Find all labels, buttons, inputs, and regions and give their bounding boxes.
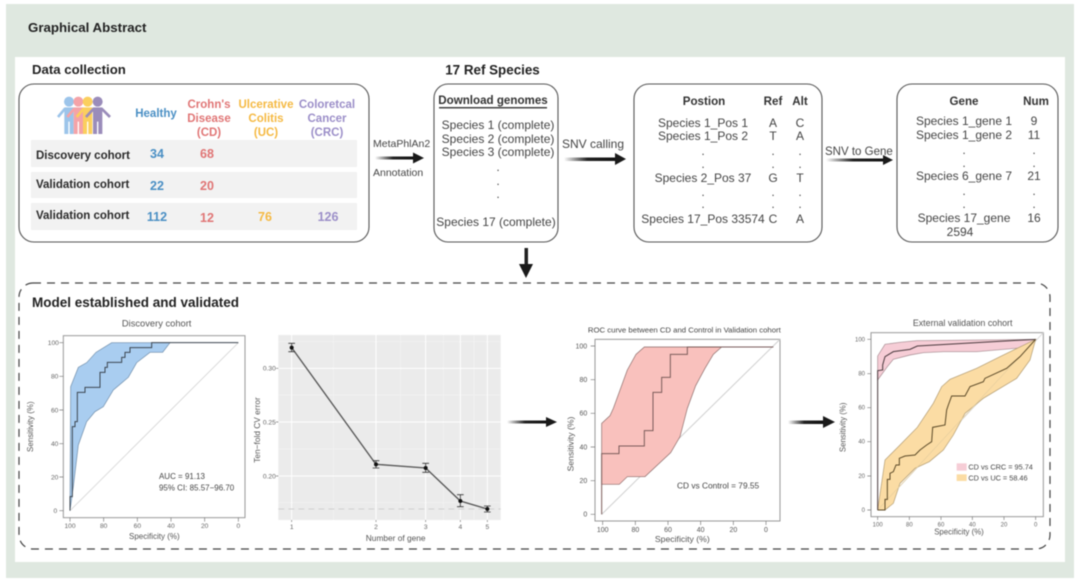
chart: validation ROC: 40: [697, 527, 705, 534]
chart: validation ROC: 20: [729, 527, 737, 534]
panel: SNV positions: Species 1_Pos 2: [658, 129, 748, 143]
panel: gene table: .: [962, 156, 966, 170]
panel: SNV positions: Alt: [792, 95, 808, 108]
chart: discovery ROC: 20: [51, 474, 59, 481]
chart: discovery ROC: 0: [53, 508, 57, 515]
chart: cross-validation error: 0.30: [263, 366, 276, 373]
panel: download genomes: .: [496, 160, 500, 174]
panel: SNV positions: .: [701, 144, 705, 158]
legend: CD vs UC = 58.46: [968, 473, 1028, 482]
chart: external validation ROC: 0: [1034, 522, 1038, 528]
chart: cross-validation error: 3: [424, 524, 428, 531]
chart: external validation ROC: 60: [938, 522, 945, 528]
legend: [957, 462, 1033, 482]
column header: healthy: Healthy: [135, 108, 177, 120]
row: external validation cohort: Validation cohort: [36, 210, 129, 222]
panel: SNV positions: .: [701, 185, 705, 199]
panel: SNV positions: Postion: [683, 95, 725, 108]
label: SNV calling: SNV calling: [562, 137, 624, 151]
chart: validation ROC: 0: [583, 512, 587, 519]
panel: SNV positions: .: [798, 197, 802, 211]
panel: gene table: [897, 84, 1058, 242]
column header: Crohn's disease: Crohn's: [188, 99, 230, 111]
panel: gene table: Species 17_gene: [918, 211, 1011, 225]
chart: validation ROC: Specificity (%): [655, 534, 710, 544]
panel: gene table: .: [1032, 184, 1036, 198]
panel: download genomes: Download genomes: [438, 94, 548, 107]
panel: gene table: .: [1032, 143, 1036, 157]
row: external validation cohort: [36, 210, 338, 225]
panel: download genomes: .: [496, 174, 500, 188]
arrow: to validation ROC: [507, 417, 557, 427]
chart: discovery ROC: Discovery cohort: [122, 318, 192, 328]
row: discovery cohort: Discovery cohort: [36, 150, 130, 162]
panel: model established and validated: [19, 283, 1050, 549]
column header: colorectal cancer: Coloretcal: [299, 99, 355, 111]
chart: external validation ROC: Specificity (%): [934, 528, 984, 537]
chart: discovery ROC: 100: [64, 523, 76, 530]
label: MetaPhlAn2: MetaPhlAn2: [373, 138, 430, 150]
panel: SNV positions: T: [796, 171, 804, 185]
chart: cross-validation error: 5: [485, 524, 489, 531]
panel: SNV positions: .: [798, 185, 802, 199]
panel: SNV positions: T: [769, 129, 777, 143]
column header: Crohn's disease: (CD): [197, 127, 221, 139]
chart: discovery ROC: 80: [100, 523, 108, 530]
chart: validation ROC: 20: [579, 478, 587, 485]
chart: validation ROC: 100: [597, 527, 609, 534]
chart: cross-validation error: [252, 335, 501, 543]
chart: cross-validation error: 0.25: [263, 419, 276, 426]
chart: external validation ROC: 40: [858, 440, 866, 446]
row: validation cohort: Validation cohort: [36, 179, 129, 191]
chart: external validation ROC: 100: [873, 522, 883, 528]
panel: gene table: .: [962, 184, 966, 198]
panel: download genomes: Species 2 (complete): [442, 132, 554, 146]
panel: SNV positions: [634, 84, 822, 242]
column header: Crohn's disease: Disease: [187, 113, 231, 125]
panel: gene table: Num: [1023, 95, 1049, 108]
row: discovery cohort: 34: [150, 147, 164, 161]
chart: validation ROC: 60: [664, 527, 672, 534]
AUC note: AUC = 91.13: [159, 472, 205, 481]
panel: gene table: .: [962, 197, 966, 211]
row: discovery cohort: [36, 147, 214, 162]
panel: SNV positions: G: [768, 171, 778, 185]
row: external validation cohort: 76: [258, 210, 272, 224]
chart: external validation ROC: 80: [906, 522, 913, 528]
chart: discovery ROC: 60: [134, 523, 141, 530]
CD vs UC band: [878, 339, 1036, 510]
panel: gene table: 16: [1027, 211, 1041, 225]
chart: external validation ROC: 20: [858, 474, 866, 480]
panel: SNV positions: Species 2_Pos 37: [655, 171, 752, 185]
row: validation cohort: [36, 179, 214, 193]
column header: ulcerative colitis: Colitis: [248, 113, 284, 125]
panel: SNV positions: C: [796, 116, 805, 130]
panel: SNV positions: Species 17_Pos 33574: [641, 212, 765, 226]
error line: [292, 348, 487, 509]
chart: discovery ROC: 60: [51, 407, 59, 414]
row: external validation cohort: 126: [318, 210, 338, 224]
panel: gene table: .: [1032, 156, 1036, 170]
chart: cross-validation error: 0.20: [263, 473, 276, 480]
column header: ulcerative colitis: Ulcerative: [239, 99, 293, 111]
chart: external validation ROC: 0: [862, 508, 866, 514]
AUC note: CD vs Control = 79.55: [677, 480, 760, 490]
panel: SNV positions: .: [771, 197, 775, 211]
column header: colorectal cancer: (CRC): [311, 127, 343, 139]
panel: download genomes: [434, 84, 558, 242]
panel: data collection table: [19, 84, 369, 242]
chart: external validation ROC: Sensitivity (%): [838, 402, 847, 452]
chart: validation ROC: [565, 326, 782, 544]
chart: discovery ROC: [26, 318, 245, 541]
chart: discovery ROC: 40: [167, 523, 175, 530]
chart: validation ROC: 80: [631, 527, 639, 534]
panel: SNV positions: .: [798, 157, 802, 171]
row: validation cohort: 20: [200, 179, 214, 193]
panel: gene table: Species 1_gene 1: [916, 114, 1012, 128]
row: external validation cohort: 112: [147, 210, 167, 224]
panel: SNV positions: .: [771, 185, 775, 199]
icon: group of people: [58, 97, 110, 134]
confidence band: [602, 347, 722, 484]
panel: download genomes: .: [496, 187, 500, 201]
panel: gene table: .: [1032, 197, 1036, 211]
arrow: SNV calling: [564, 153, 626, 165]
panel: download genomes: Species 17 (complete): [436, 215, 556, 229]
chart: external validation ROC: 40: [969, 522, 976, 528]
chart: external validation ROC: 100: [855, 337, 866, 343]
panel: gene table: Species 6_gene 7: [916, 169, 1012, 183]
panel: SNV positions: .: [771, 157, 775, 171]
legend: CD vs CRC = 95.74: [968, 462, 1033, 471]
chart: discovery ROC: 80: [51, 374, 59, 381]
panel: download genomes: Species 3 (complete): [442, 145, 554, 159]
panel: SNV positions: .: [701, 157, 705, 171]
heading: 17 ref species: 17 Ref Species: [445, 62, 540, 78]
label: SNV to gene: SNV to Gene: [825, 146, 893, 158]
chart: cross-validation error: 1: [290, 524, 294, 531]
panel: SNV positions: Species 1_Pos 1: [658, 116, 748, 130]
panel: SNV positions: A: [769, 116, 777, 130]
chart: validation ROC: 60: [579, 411, 587, 418]
chart: external validation ROC: 80: [858, 372, 866, 378]
title: Graphical Abstract: [28, 20, 147, 35]
row: external validation cohort: 12: [200, 211, 214, 225]
chart: external validation ROC: [838, 318, 1043, 537]
CD vs UC line: [878, 339, 1036, 510]
chart: discovery ROC: 40: [51, 441, 59, 448]
panel: SNV positions: C: [769, 212, 778, 226]
chart: discovery ROC: 100: [48, 340, 59, 347]
panel: gene table: .: [962, 143, 966, 157]
chart: discovery ROC: 20: [201, 523, 209, 530]
chart: validation ROC: 40: [579, 444, 587, 451]
column header: ulcerative colitis: (UC): [254, 127, 278, 139]
arrow: to external validation: [788, 416, 835, 428]
chart: cross-validation error: Number of gene: [366, 533, 426, 543]
panel: SNV positions: .: [701, 197, 705, 211]
heading: data collection: Data collection: [32, 62, 126, 77]
label: annotation: Annotation: [373, 167, 423, 179]
panel: gene table: 21: [1027, 169, 1041, 183]
chart: validation ROC: 0: [764, 527, 768, 534]
confidence band: [70, 343, 170, 511]
CD vs CRC band: [878, 339, 1036, 380]
panel: gene table: 2594: [947, 225, 974, 239]
heading: model established: Model established and validated: [32, 295, 239, 310]
CD vs CRC line: [878, 339, 1036, 510]
chart: discovery ROC: 0: [236, 523, 240, 530]
panel: SNV positions: .: [798, 144, 802, 158]
panel: SNV positions: .: [771, 144, 775, 158]
ROC line: [602, 347, 773, 514]
row: discovery cohort: 68: [200, 147, 214, 161]
chart: external validation ROC: External validation cohort: [913, 318, 1013, 328]
chart: external validation ROC: 60: [858, 406, 866, 412]
ROC line: [70, 343, 238, 511]
panel: gene table: Species 1_gene 2: [916, 128, 1012, 142]
panel: gene table: 11: [1028, 128, 1041, 142]
arrow: down to model: [519, 248, 533, 278]
chart: discovery ROC: Sensitivity (%): [26, 401, 35, 452]
chart: cross-validation error: 4: [458, 524, 462, 531]
panel: SNV positions: Ref: [764, 95, 782, 108]
AUC note: 95% CI: 85.57−96.70: [159, 483, 235, 492]
arrow: annotation: [375, 152, 424, 164]
row: validation cohort: 22: [150, 179, 164, 193]
panel: download genomes: Species 1 (complete): [442, 118, 554, 132]
panel: gene table: 9: [1031, 114, 1038, 128]
column header: colorectal cancer: Cancer: [308, 113, 347, 125]
chart: external validation ROC: 20: [1001, 522, 1008, 528]
chart: validation ROC: ROC curve between CD and Control in Validation cohort: [588, 326, 782, 335]
error bars: [288, 343, 491, 512]
chart: validation ROC: Sensitivity (%): [565, 416, 575, 471]
panel: SNV positions: A: [796, 129, 804, 143]
chart: validation ROC: 80: [579, 377, 587, 384]
chart: cross-validation error: 2: [374, 524, 378, 531]
chart: discovery ROC: Specificity (%): [129, 532, 180, 541]
chart: validation ROC: 100: [576, 343, 587, 350]
panel: SNV positions: A: [796, 212, 804, 226]
panel: gene table: Gene: [950, 95, 979, 108]
chart: cross-validation error: Ten−fold CV error: [252, 397, 262, 463]
arrow: SNV to gene: [826, 155, 893, 165]
